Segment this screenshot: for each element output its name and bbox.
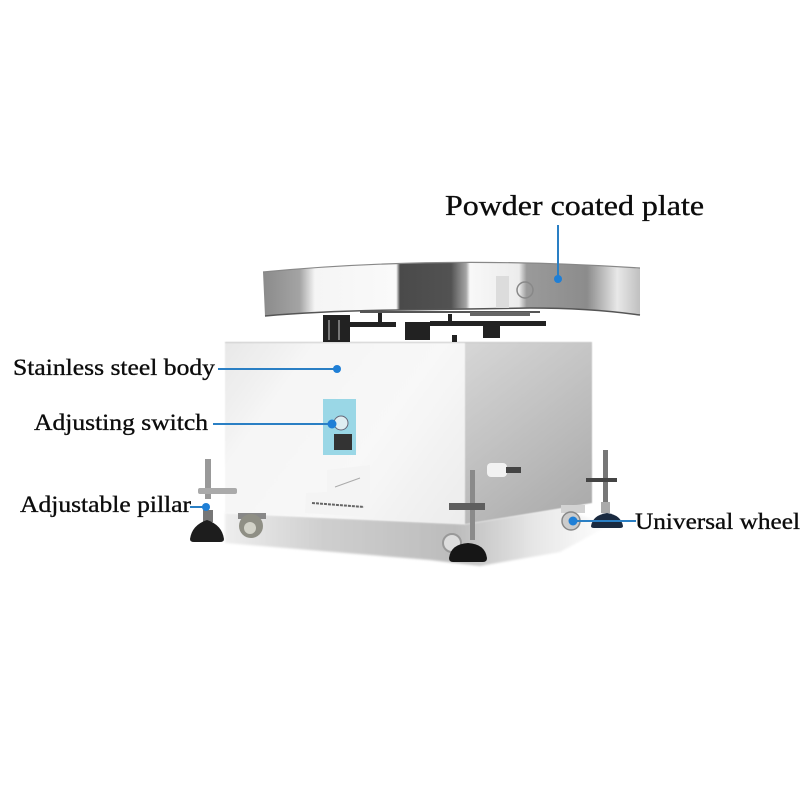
- rotating plate: [263, 262, 640, 316]
- control panel: [323, 399, 356, 455]
- callout: universal wheel: [568, 509, 800, 534]
- callout: stainless steel body: [13, 355, 341, 380]
- callout: stainless steel body: Stainless steel body: [13, 355, 216, 380]
- body front face: [225, 342, 465, 524]
- floor shadow: [225, 508, 610, 566]
- plate rim: [263, 262, 640, 272]
- callout: powder coated plate: Powder coated plate: [445, 191, 704, 222]
- callout: adjusting switch: Adjusting switch: [34, 410, 208, 436]
- plate band: [263, 262, 640, 316]
- left rear foot: [190, 459, 237, 542]
- callout: adjustable pillar: Adjustable pillar: [20, 492, 191, 517]
- plate bracket tab: [496, 276, 509, 308]
- callout: powder coated plate: [445, 191, 704, 283]
- body side face: [465, 342, 592, 524]
- warning sticker: [305, 465, 370, 517]
- left caster: [238, 513, 266, 538]
- right caster: [561, 505, 585, 530]
- panel dial: [334, 416, 348, 430]
- machine body: [225, 342, 592, 524]
- front foot and caster: [443, 470, 487, 562]
- cable gland: [487, 463, 521, 477]
- callout: universal wheel: Universal wheel: [635, 509, 800, 534]
- right foot: [586, 450, 623, 528]
- callout: adjusting switch: [34, 410, 336, 436]
- support brackets under plate: [323, 311, 546, 342]
- panel socket: [334, 434, 352, 450]
- body top edge: [225, 342, 592, 344]
- plate logo: [517, 282, 533, 298]
- panel plate: [323, 399, 356, 455]
